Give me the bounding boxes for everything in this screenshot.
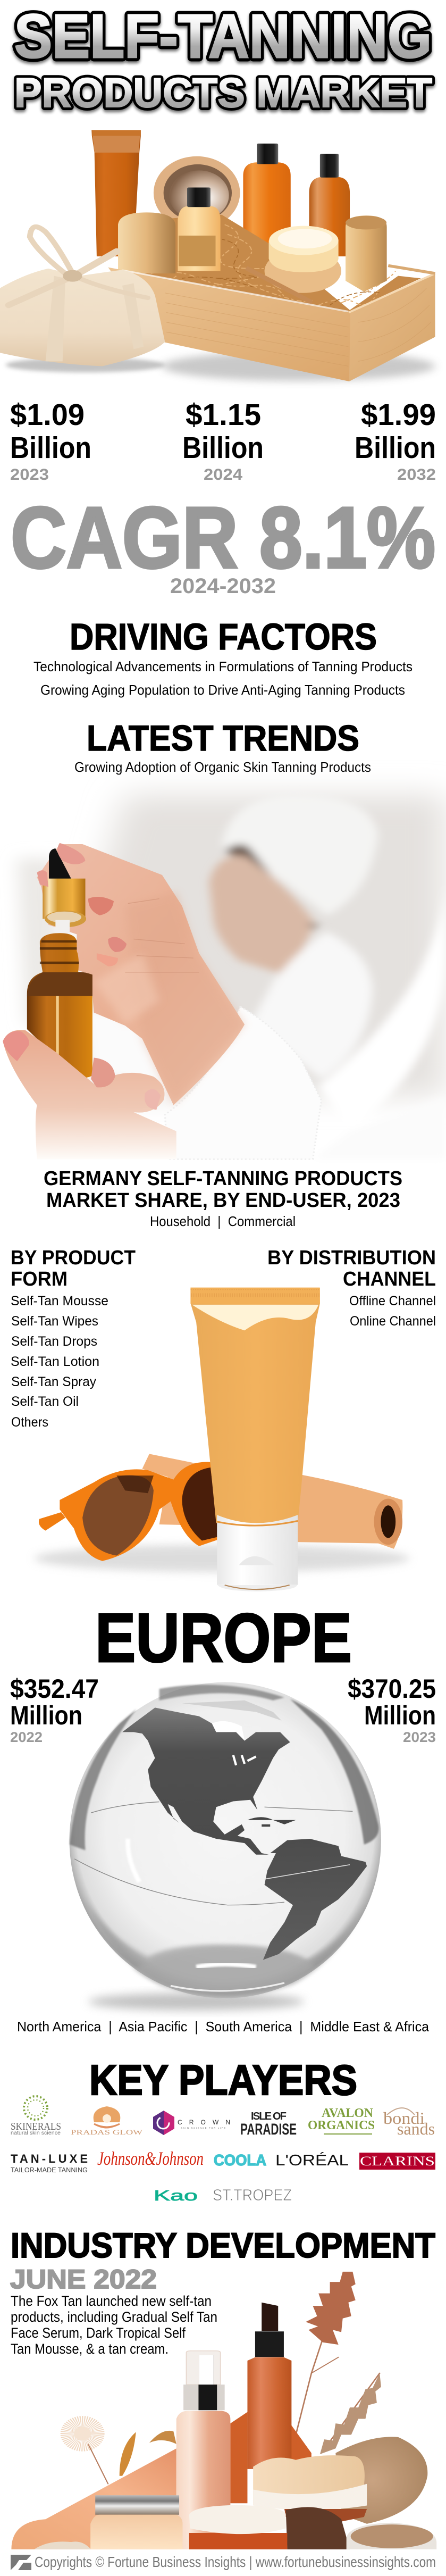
by product form list: Self-Tan Mousse bbox=[11, 1294, 108, 1308]
by product form list: Self-Tan Drops bbox=[11, 1334, 97, 1349]
stat: 2024 market size bbox=[182, 398, 264, 483]
logo: Bondi Sands: bondi bbox=[383, 2108, 425, 2128]
logo: Johnson & Johnson: Johnson&Johnson bbox=[97, 2148, 204, 2169]
development description: Tan Mousse, & a tan cream. bbox=[11, 2341, 169, 2357]
development description: Face Serum, Dark Tropical Self bbox=[11, 2325, 186, 2341]
logo: Isle of Paradise: ISLE OF bbox=[251, 2111, 287, 2122]
driving factors: DRIVING FACTORS bbox=[70, 616, 377, 657]
logo: Tan-Luxe: TAILOR-MADE TANNING bbox=[11, 2166, 88, 2174]
logo: Crown bbox=[153, 2111, 230, 2135]
logo: Coola: COOLA bbox=[214, 2152, 266, 2169]
by product form list bbox=[11, 1247, 136, 1430]
stat: Europe 2023 bbox=[348, 1674, 436, 1745]
chart title: Germany market share by end-user: GERMANY SELF-TANNING PRODUCTS bbox=[44, 1168, 402, 1190]
Europe heading: EUROPE bbox=[95, 1599, 352, 1677]
driving factors bbox=[33, 616, 413, 698]
logo: Avalon Organics bbox=[308, 2106, 375, 2135]
driving factors: Technological Advancements in Formulations of Tanning Products bbox=[33, 658, 413, 674]
stat: Europe 2022: Million bbox=[10, 1700, 82, 1730]
logo: L'Oreal: L'ORÉAL bbox=[275, 2152, 349, 2169]
stat: 2023 market size bbox=[10, 398, 91, 483]
logo: Skinerals: natural skin science bbox=[11, 2130, 61, 2136]
by product form list: BY PRODUCT bbox=[11, 1247, 136, 1269]
stat: Europe 2023: 2023 bbox=[403, 1729, 436, 1745]
logo: Tan-Luxe bbox=[11, 2152, 88, 2174]
logo: Isle of Paradise bbox=[240, 2111, 297, 2138]
logo: Kao: Kao bbox=[154, 2187, 198, 2204]
stat: 2032 market size bbox=[355, 398, 436, 483]
driving factors: Growing Aging Population to Drive Anti-Aging Tanning Products bbox=[40, 682, 405, 698]
stat: Europe 2022 bbox=[10, 1674, 99, 1745]
stat: Europe 2023: $370.25 bbox=[348, 1674, 436, 1704]
logo: St. Tropez: ST.TROPEZ bbox=[213, 2186, 292, 2204]
development description: The Fox Tan launched new self-tan bbox=[11, 2293, 212, 2309]
by distribution channel list: Online Channel bbox=[350, 1314, 436, 1329]
photo: cosmetics with dried plants bbox=[11, 2272, 436, 2549]
stat: 2023 market size: 2023 bbox=[10, 466, 49, 483]
logo: Bondi Sands bbox=[383, 2108, 435, 2138]
by distribution channel list: BY DISTRIBUTION bbox=[267, 1247, 436, 1269]
latest trends bbox=[74, 718, 371, 775]
title: PRODUCTS MARKET bbox=[14, 69, 432, 116]
chart title: Germany market share by end-user bbox=[44, 1168, 402, 1229]
by distribution channel list bbox=[267, 1247, 436, 1329]
stat: 2023 market size: Billion bbox=[10, 431, 91, 465]
CAGR figure: 2024-2032 bbox=[170, 574, 276, 598]
latest trends: Growing Adoption of Organic Skin Tanning Products bbox=[74, 759, 371, 775]
latest trends: LATEST TRENDS bbox=[87, 718, 359, 758]
logo: Bondi Sands: sands bbox=[397, 2119, 435, 2138]
logo: Crown: SKIN SCIENCE FOR LIFE bbox=[181, 2127, 225, 2129]
stat: 2032 market size: 2032 bbox=[397, 466, 436, 483]
title: PRODUCTS MARKET bbox=[14, 69, 432, 116]
by distribution channel list: CHANNEL bbox=[343, 1268, 436, 1290]
stat: 2032 market size: $1.99 bbox=[361, 398, 436, 432]
logo: Avalon Organics: ORGANICS bbox=[308, 2119, 375, 2132]
by product form list: Self-Tan Lotion bbox=[11, 1354, 99, 1369]
photo: hands holding dropper bottle bbox=[3, 794, 446, 1159]
stat: Europe 2022: 2022 bbox=[10, 1729, 43, 1745]
logo: Crown: CROWN bbox=[178, 2119, 230, 2126]
stat: Europe 2023: Million bbox=[364, 1700, 436, 1730]
stat: Europe 2022: $352.47 bbox=[10, 1674, 99, 1704]
by product form list: Self-Tan Wipes bbox=[11, 1314, 98, 1329]
development description bbox=[11, 2293, 217, 2357]
logo: Clarins bbox=[359, 2153, 435, 2170]
stat: 2032 market size: Billion bbox=[355, 431, 436, 465]
by product form list: Self-Tan Oil bbox=[11, 1394, 79, 1409]
stat: 2024 market size: $1.15 bbox=[186, 398, 261, 432]
key players heading: KEY PLAYERS bbox=[89, 2056, 357, 2104]
chart title: Germany market share by end-user: MARKET SHARE, BY END-USER, 2023 bbox=[46, 1189, 400, 1212]
date: JUNE 2022 bbox=[10, 2264, 157, 2294]
development description: products, including Gradual Self Tan bbox=[11, 2309, 217, 2325]
photo: tube, sunglasses and pouch bbox=[34, 1288, 409, 1585]
stat: 2023 market size: $1.09 bbox=[10, 398, 85, 432]
tube cap base bbox=[217, 1585, 297, 1591]
logo: Clarins: CLARINS bbox=[360, 2154, 435, 2169]
by product form list: Self-Tan Spray bbox=[11, 1374, 96, 1389]
logo: Tan-Luxe: TAN-LUXE bbox=[11, 2152, 88, 2165]
by distribution channel list: Offline Channel bbox=[349, 1294, 436, 1308]
other regions: North America | Asia Pacific | South America | Middle East & Africa bbox=[17, 2019, 430, 2035]
logo: Pradas Glow: PRADAS GLOW bbox=[71, 2128, 143, 2136]
hero photo: cosmetics in wooden box bbox=[0, 130, 435, 381]
by product form list: FORM bbox=[11, 1268, 68, 1290]
logo: Skinerals: SKINERALS bbox=[11, 2121, 61, 2132]
chart title: Germany market share by end-user: Household | Commercial bbox=[150, 1213, 296, 1229]
by product form list: Others bbox=[11, 1415, 48, 1430]
logo: Avalon Organics: AVALON bbox=[322, 2106, 374, 2120]
title bbox=[14, 2, 432, 116]
stat: 2024 market size: 2024 bbox=[204, 466, 242, 483]
globe bbox=[70, 1682, 381, 2010]
logo: Pradas Glow bbox=[71, 2106, 143, 2136]
logo: Skinerals bbox=[11, 2096, 61, 2136]
stat: 2024 market size: Billion bbox=[182, 431, 264, 465]
logo: Isle of Paradise: PARADISE bbox=[240, 2121, 297, 2138]
